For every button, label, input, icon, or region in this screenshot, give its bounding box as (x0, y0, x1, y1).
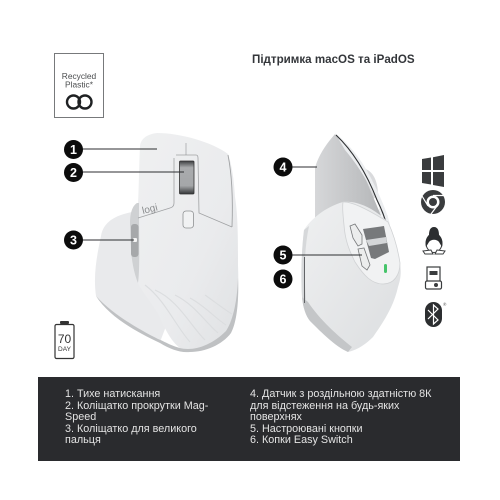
callout 6 (274, 270, 292, 288)
icon: bluetooth (425, 301, 447, 327)
icon: battery 70 day: DAY (58, 346, 72, 353)
legend column 2: поверхнях (250, 411, 302, 423)
palm contour lines (145, 285, 232, 342)
badge: recycled plastic: Recycled (62, 71, 97, 81)
upper side rim (301, 226, 309, 300)
side button upper (350, 224, 362, 246)
legend column 2: 5. Настроювані кнопки (250, 422, 363, 434)
icon: bluetooth: ® (443, 301, 447, 307)
icon: battery 70 day (55, 321, 74, 358)
wheel hump (358, 168, 378, 200)
thumb wheel housing (130, 203, 139, 283)
legend column 2: для відстеження на будь-яких (250, 400, 399, 412)
badge: recycled plastic: Plastic* (65, 80, 94, 90)
leader lines (80, 149, 362, 255)
callout 4 (274, 158, 292, 176)
badge: recycled plastic (54, 54, 104, 118)
callout 1 (64, 140, 83, 159)
panel: legend (38, 377, 460, 461)
icon: recycle arrows (67, 96, 92, 108)
thumb rest (95, 212, 176, 342)
side button lower (358, 248, 370, 270)
callout 2: 2 (70, 166, 77, 180)
logo text: logi (141, 202, 159, 217)
legend column 1 (65, 388, 208, 446)
dark seam (336, 135, 390, 240)
wheel recess (138, 155, 232, 227)
main body (137, 133, 238, 352)
legend column 2: 4. Датчик з роздільною здатністю 8К (250, 388, 431, 400)
callout 3: 3 (70, 234, 77, 248)
mode button (183, 211, 194, 228)
callout 2 (64, 163, 83, 182)
legend column 1: 2. Коліщатко прокрутки Mag- (65, 400, 208, 412)
thumb panel (343, 202, 400, 284)
icon: linux penguin (423, 227, 445, 254)
callout 4: 4 (280, 160, 287, 174)
callout 5 (274, 246, 292, 264)
legend column 1: 3. Коліщатко для великого (65, 422, 197, 434)
legend column 1: пальця (65, 434, 101, 446)
icon: battery 70 day: 70 (58, 332, 71, 346)
right mouse: side view (301, 133, 401, 352)
callout 1: 1 (70, 143, 77, 157)
icon: windows (422, 155, 444, 187)
legend column 1: 1. Тихе натискання (65, 388, 160, 400)
legend column 2: 6. Копки Easy Switch (250, 434, 353, 446)
icon: usb receiver (426, 267, 442, 289)
scroll wheel (180, 161, 194, 194)
grey back (315, 134, 385, 225)
tail tab (378, 205, 388, 220)
rim dark line (304, 257, 306, 303)
left mouse: top view (95, 133, 238, 352)
bottom rim shading (96, 278, 238, 352)
green led (384, 264, 387, 273)
icon: chrome (421, 190, 445, 214)
thumb wheel (363, 226, 389, 259)
callout 5: 5 (280, 248, 287, 262)
top shell (335, 133, 390, 225)
callout 3 (64, 230, 83, 250)
legend column 1: Speed (65, 411, 96, 423)
side body (301, 202, 401, 352)
legend column 2 (250, 388, 432, 446)
thumb wheel (131, 224, 138, 257)
right button seam (228, 155, 232, 227)
lower side facet (302, 297, 352, 352)
callout 6: 6 (280, 272, 287, 286)
middle seam (185, 143, 187, 155)
heading: Підтримка macOS та iPadOS (252, 53, 415, 66)
